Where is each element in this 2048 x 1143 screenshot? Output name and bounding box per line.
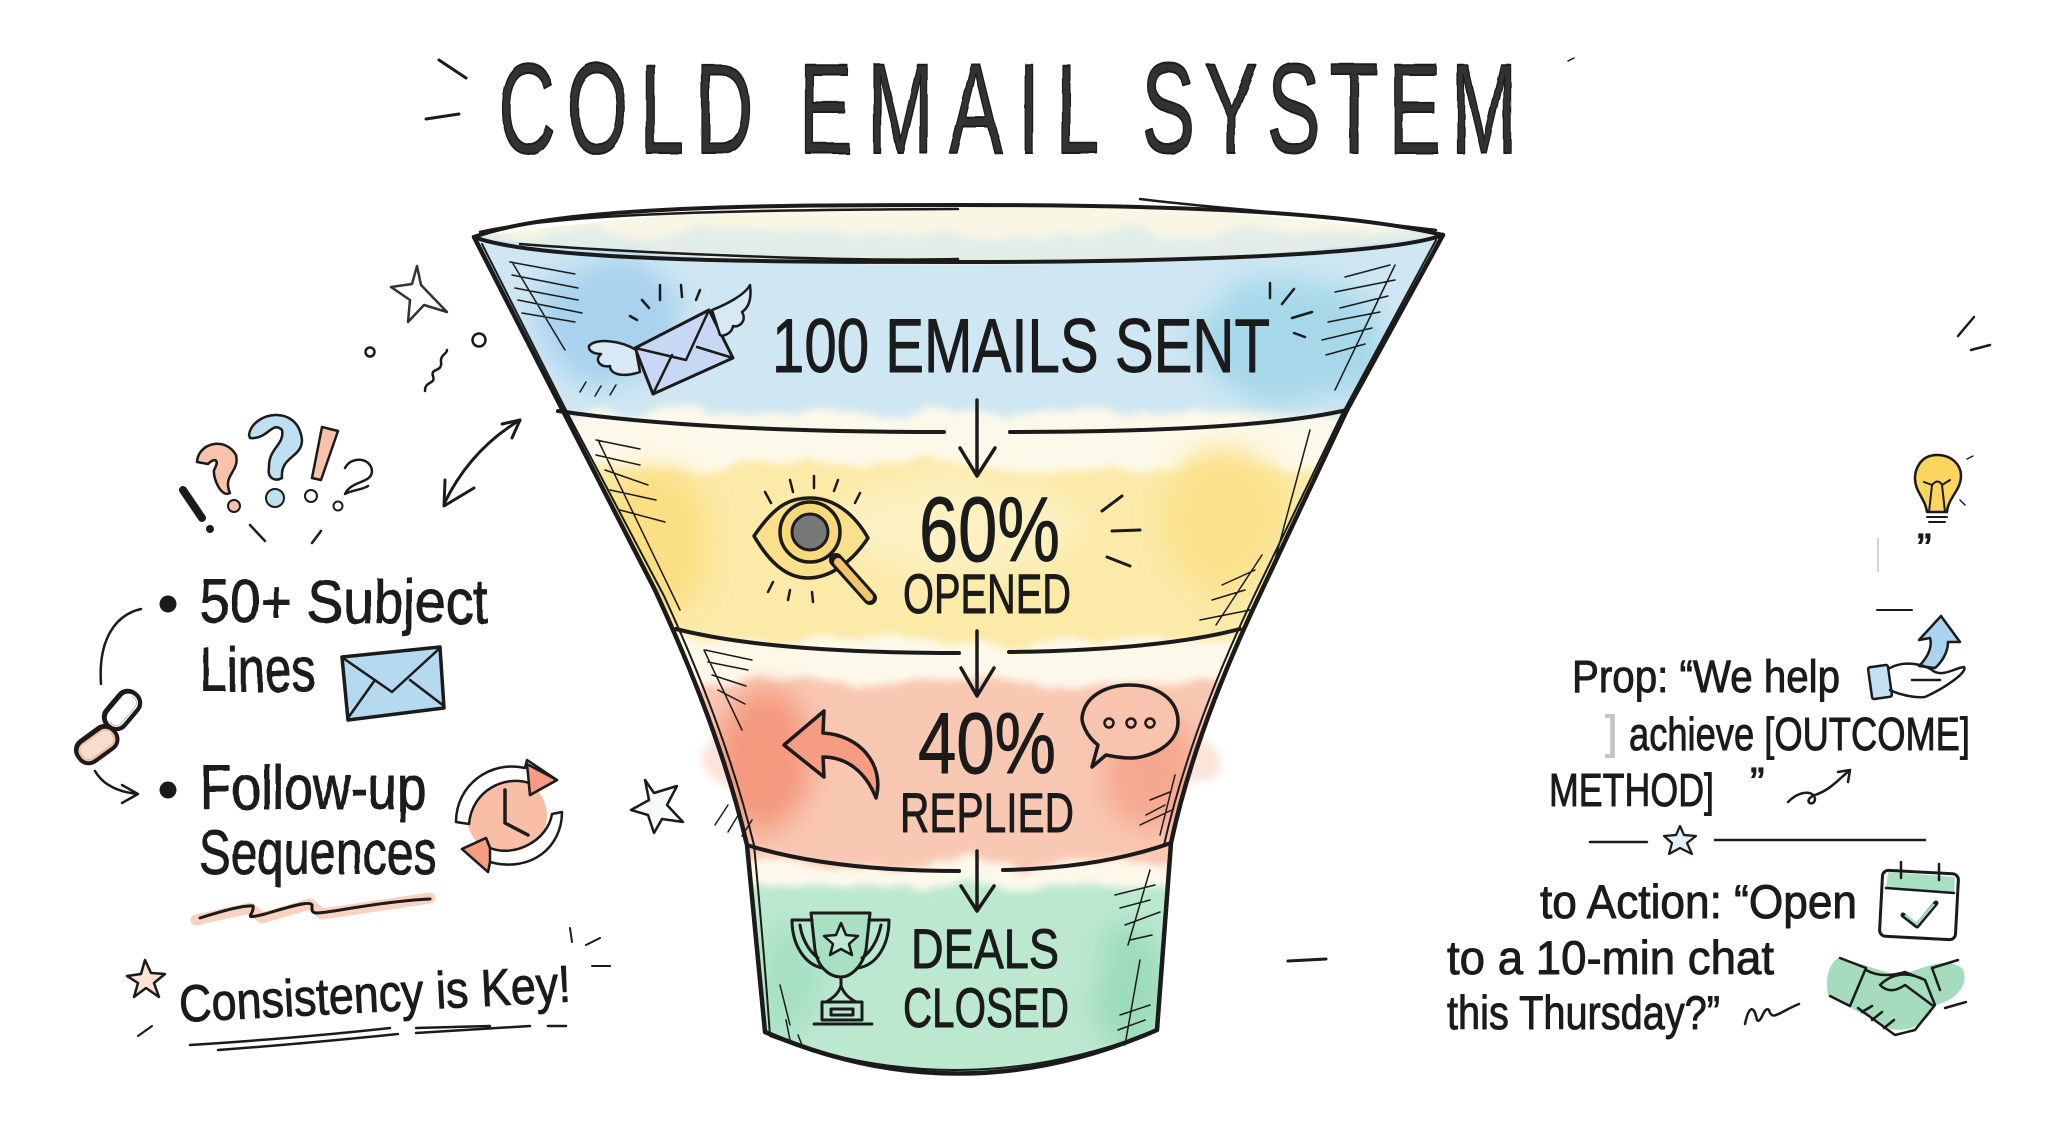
bullet [160,782,176,798]
dash mark [1288,959,1326,961]
funnel [450,190,1460,1090]
stage 1: emails sent [589,283,1312,394]
text: follow-up sequences: Sequences [199,819,437,888]
underlines [190,1026,566,1050]
paint bleed: replied stage [702,698,1218,822]
text: closed: CLOSED [903,976,1069,1039]
title [426,38,1574,181]
icon: calendar [1879,862,1959,940]
icon: chain link [68,688,143,773]
text: 50+ subject lines: 50+ Subject [200,568,488,637]
left doodles: star and squiggle [366,266,486,391]
text: 60%: 60% [919,479,1060,581]
text: 100 emails sent: 100 EMAILS SENT [772,304,1270,389]
icon: hand with up arrow [1868,616,1964,699]
funnel outline [474,235,1443,1074]
connector arc [101,609,141,684]
text: value proposition: ] [1605,706,1618,758]
double-headed arrow [444,420,520,506]
divider with star [1590,826,1925,854]
text: call to action [1447,875,1857,1039]
icon: reply arrow [784,711,878,798]
stage 4: deals closed [792,913,1069,1039]
icon: handshake [1827,958,1966,1035]
stage arrows [960,400,995,911]
funnel rim [474,199,1443,266]
question marks [183,415,372,543]
text: call to action: to a 10-min chat [1447,931,1774,984]
squiggle arrow [1788,770,1850,803]
stage dividers [558,410,1347,871]
text: 50+ subject lines: Lines [200,636,316,705]
text: 50+ subject lines [200,568,488,705]
sparkles [138,928,610,1036]
text: deals: DEALS [911,917,1059,980]
left list [68,568,610,1050]
title: SYSTEM [1142,38,1517,181]
icon: clock with cycle arrows [456,760,562,872]
star [127,960,165,997]
funnel watercolor fill [450,190,1460,1090]
icon: trophy [792,913,889,1024]
icon: light bulb [1915,455,1973,522]
text: follow-up sequences [199,754,437,888]
text: value proposition: ” [1750,759,1765,808]
funnel outline second stroke [482,240,1436,1070]
title: COLD [498,38,753,181]
callout: consistency is key [127,928,610,1050]
text: value proposition: Prop: “We help [1572,651,1840,702]
squiggle [1745,1004,1799,1024]
stage 3: replied [784,685,1178,844]
text: value proposition [1549,651,1970,816]
fragments: partly erased copy [1877,525,1932,610]
squiggle underline [196,898,430,920]
icon: speech bubble [1082,685,1178,767]
text: value proposition: METHOD] [1549,764,1714,816]
text: 40%: 40% [918,696,1056,792]
text: call to action: to Action: “Open [1540,875,1857,928]
icon: eye with magnifier [754,476,870,602]
star doodle [631,780,683,833]
text: follow-up sequences: Follow-up [200,754,426,823]
icon: winged envelope [589,285,751,394]
stage 2: opened [754,476,1140,625]
text: call to action: this Thursday?” [1447,986,1720,1039]
bullet [160,596,176,612]
icon: envelope [342,647,444,720]
right doodles [1958,317,1990,350]
sparkles right [1102,496,1140,566]
title: EMAIL [799,38,1100,181]
sparkles right [1270,283,1312,337]
text: opened: OPENED [903,562,1071,625]
fragments: partly erased copy: ” [1917,525,1932,574]
connector arrow [95,771,138,803]
text: Consistency is Key! [178,956,572,1034]
text: replied: REPLIED [900,781,1074,844]
hatching marks [510,262,1395,1045]
